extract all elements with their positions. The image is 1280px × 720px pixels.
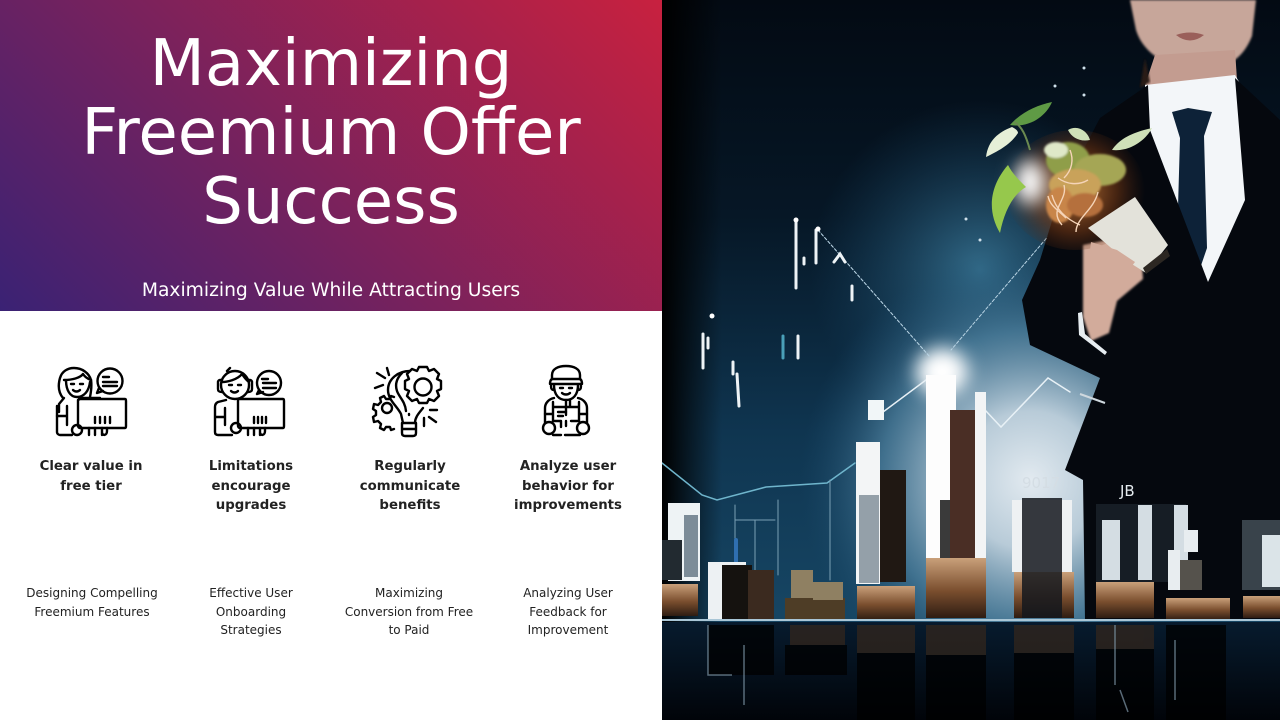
chart sparkle lines xyxy=(662,66,1086,580)
subtitle: Maximizing Value While Attracting Users xyxy=(142,280,520,301)
label: communicate: communicate xyxy=(360,478,460,494)
label: clear value: free tier xyxy=(60,478,122,494)
coin city buildings: 9017 xyxy=(1022,474,1060,492)
icon: lightbulb with gears xyxy=(372,366,442,438)
background sky xyxy=(662,0,1280,720)
description: feedback: Improvement xyxy=(528,623,608,637)
description: conversion xyxy=(345,586,473,637)
description: conversion: Conversion from Free xyxy=(345,604,473,618)
description: onboarding: Strategies xyxy=(220,623,282,637)
label: analyze: behavior for xyxy=(522,478,614,494)
label: limitations: Limitations xyxy=(209,459,293,474)
icon: man with headset at laptop xyxy=(214,366,286,436)
title: Freemium Offer xyxy=(81,96,581,170)
label: communicate xyxy=(360,459,460,513)
icon: woman at laptop with speech bubble xyxy=(56,366,128,436)
label: clear value: Clear value in xyxy=(40,459,142,474)
label: limitations: upgrades xyxy=(216,498,286,513)
label: analyze xyxy=(514,459,622,513)
description: feedback: Feedback for xyxy=(529,604,607,618)
title: Maximizing xyxy=(150,27,512,101)
description: conversion: Maximizing xyxy=(375,586,443,600)
coin city buildings: JB xyxy=(1119,482,1135,500)
label: clear value xyxy=(40,459,142,494)
description: onboarding: Effective User xyxy=(209,586,293,600)
label: limitations: encourage xyxy=(211,478,291,494)
description: features: Designing Compelling xyxy=(26,586,158,600)
label: analyze: Analyze user xyxy=(520,459,616,474)
icon: worker with helmet xyxy=(542,364,590,436)
coin city buildings xyxy=(662,375,1280,620)
plant xyxy=(986,102,1170,308)
panel: gradient header xyxy=(0,0,662,311)
reflective floor xyxy=(662,619,1280,720)
description: feedback xyxy=(523,586,613,637)
person xyxy=(1022,0,1280,620)
label: limitations xyxy=(209,459,293,513)
description: features xyxy=(26,586,158,618)
description: conversion: to Paid xyxy=(389,623,429,637)
description: onboarding: Onboarding xyxy=(216,604,286,618)
label: analyze: improvements xyxy=(514,498,622,513)
description: features: Freemium Features xyxy=(34,604,150,618)
description: onboarding xyxy=(209,586,293,637)
description: feedback: Analyzing User xyxy=(523,586,613,600)
label: communicate: benefits xyxy=(379,498,441,513)
label: communicate: Regularly xyxy=(374,459,446,474)
title: Success xyxy=(202,165,460,239)
photo: businesswoman holding plant above coin-stack city xyxy=(662,0,1280,720)
title xyxy=(81,27,581,239)
